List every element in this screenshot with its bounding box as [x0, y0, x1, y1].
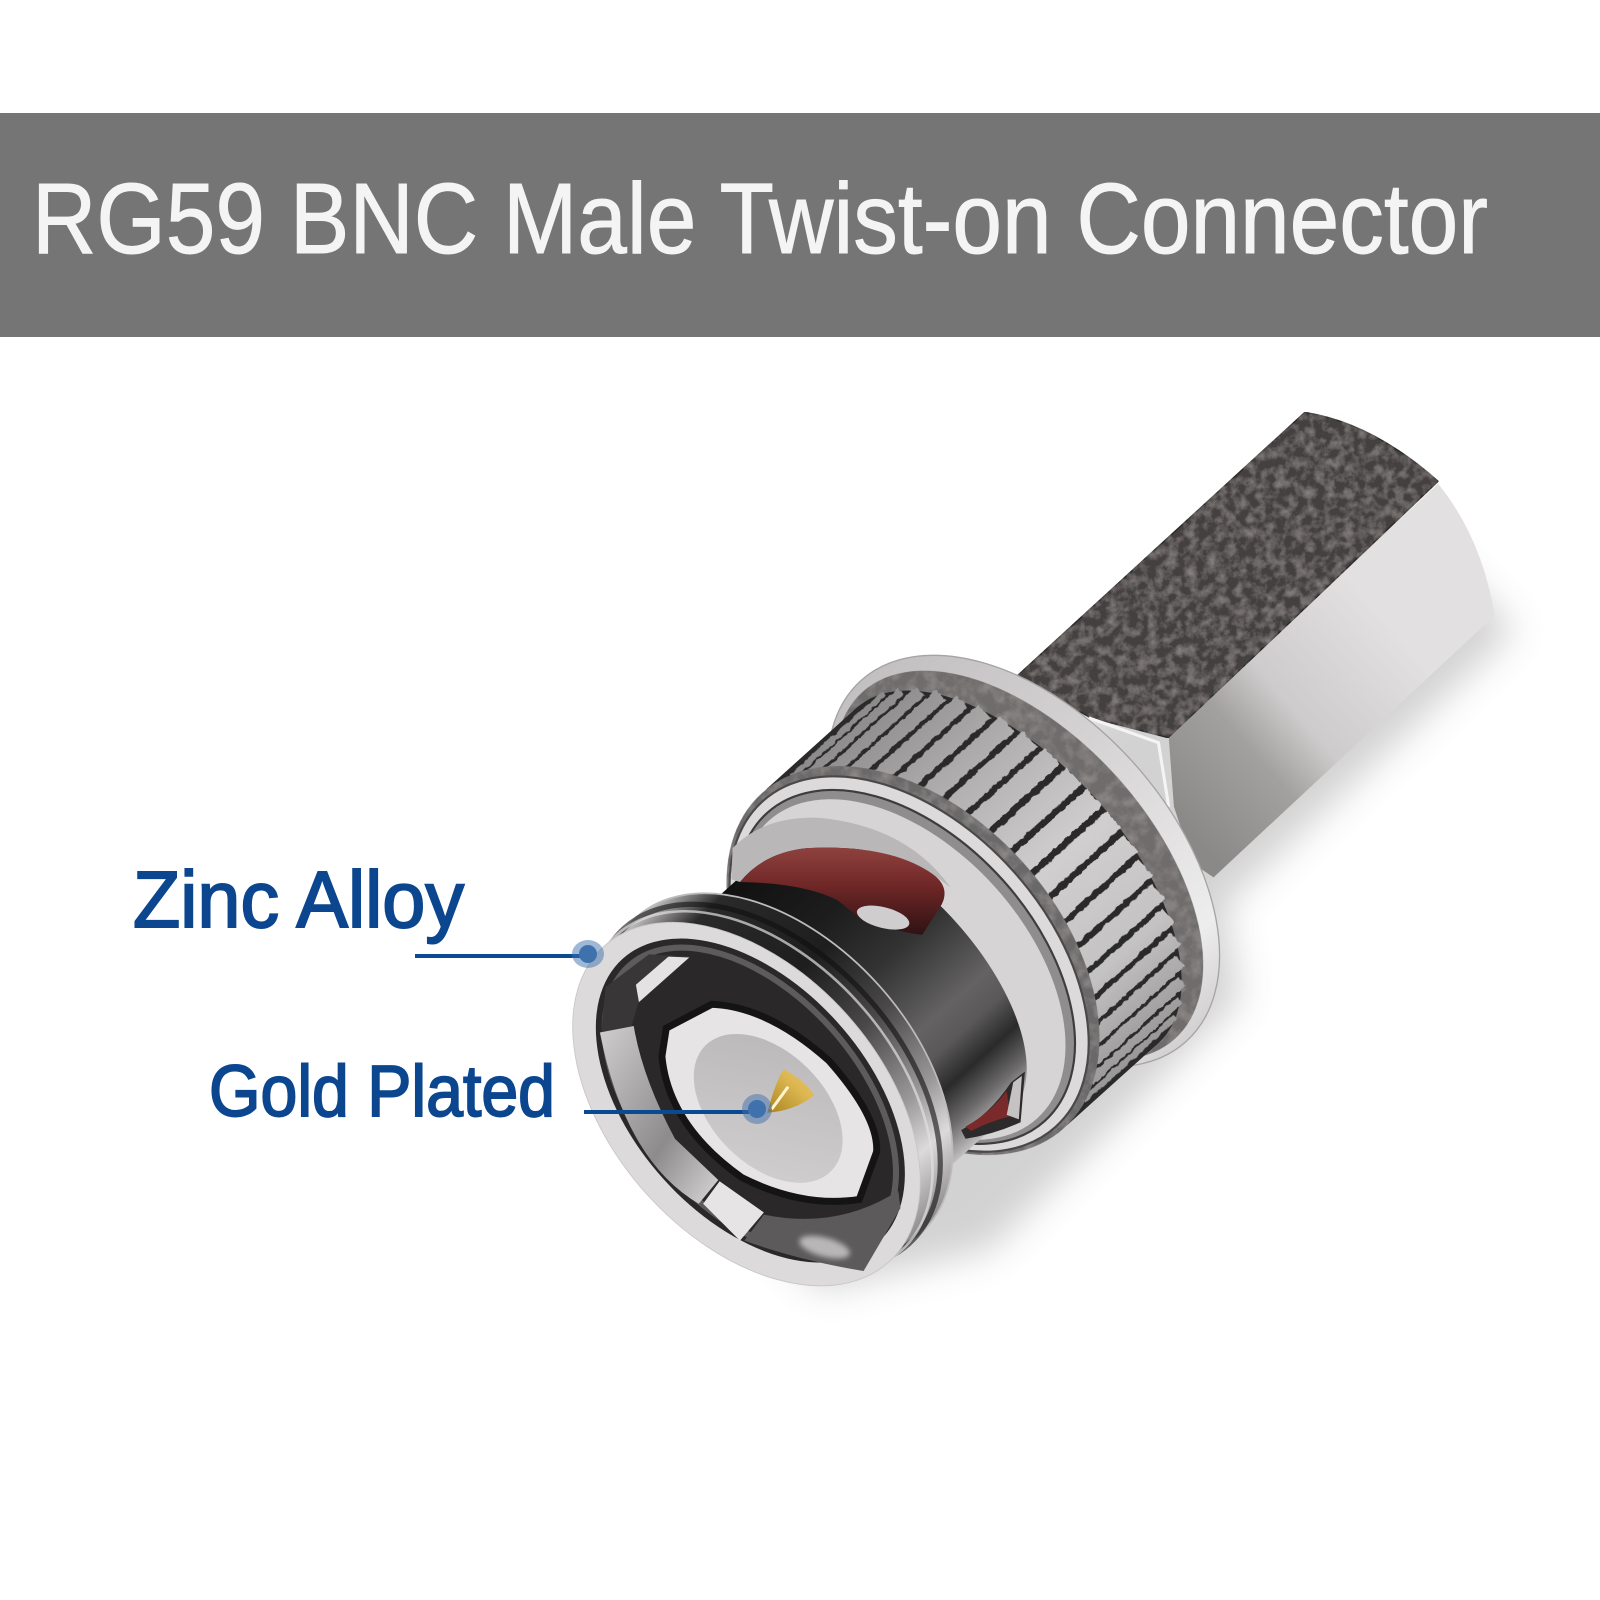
label: Zinc Alloy: Zinc Alloy — [133, 855, 464, 944]
label: Gold Plated: Gold Plated — [209, 1052, 555, 1132]
inner wall left — [600, 1026, 718, 1204]
hex base highlight — [1089, 718, 1169, 807]
lower slot with red gasket — [961, 1072, 1025, 1139]
bottom wall highlight — [797, 1231, 852, 1263]
upper slot rim — [731, 818, 950, 887]
front ring side wall — [517, 827, 1021, 1341]
leader: Zinc Alloy — [415, 940, 604, 968]
knurled grip — [766, 630, 1245, 1124]
lug highlight — [636, 957, 689, 1002]
red gasket in upper slot — [740, 848, 945, 935]
front ring face — [504, 856, 989, 1352]
white insulator — [662, 1004, 877, 1211]
title banner — [0, 113, 1600, 337]
hex crimp tail — [1017, 412, 1495, 877]
pin highlight — [772, 1087, 788, 1109]
barrel — [656, 790, 1075, 1217]
dark hex face — [1017, 412, 1438, 738]
main body cylinders — [504, 582, 1296, 1352]
light hex face — [1169, 484, 1495, 877]
bayonet sleeve — [653, 694, 1173, 1227]
leader: Gold Plated — [584, 1094, 772, 1124]
drop shadow — [720, 440, 1515, 1290]
gold pin — [767, 1069, 814, 1113]
inner wall gap bright — [703, 1181, 764, 1241]
slot highlight — [854, 901, 912, 934]
inner wall bottom — [744, 1191, 900, 1271]
inner wall lug upper left — [601, 954, 690, 1032]
rear collar — [751, 582, 1296, 1140]
inner disc — [665, 1006, 871, 1211]
connector photo illustration — [504, 412, 1515, 1352]
